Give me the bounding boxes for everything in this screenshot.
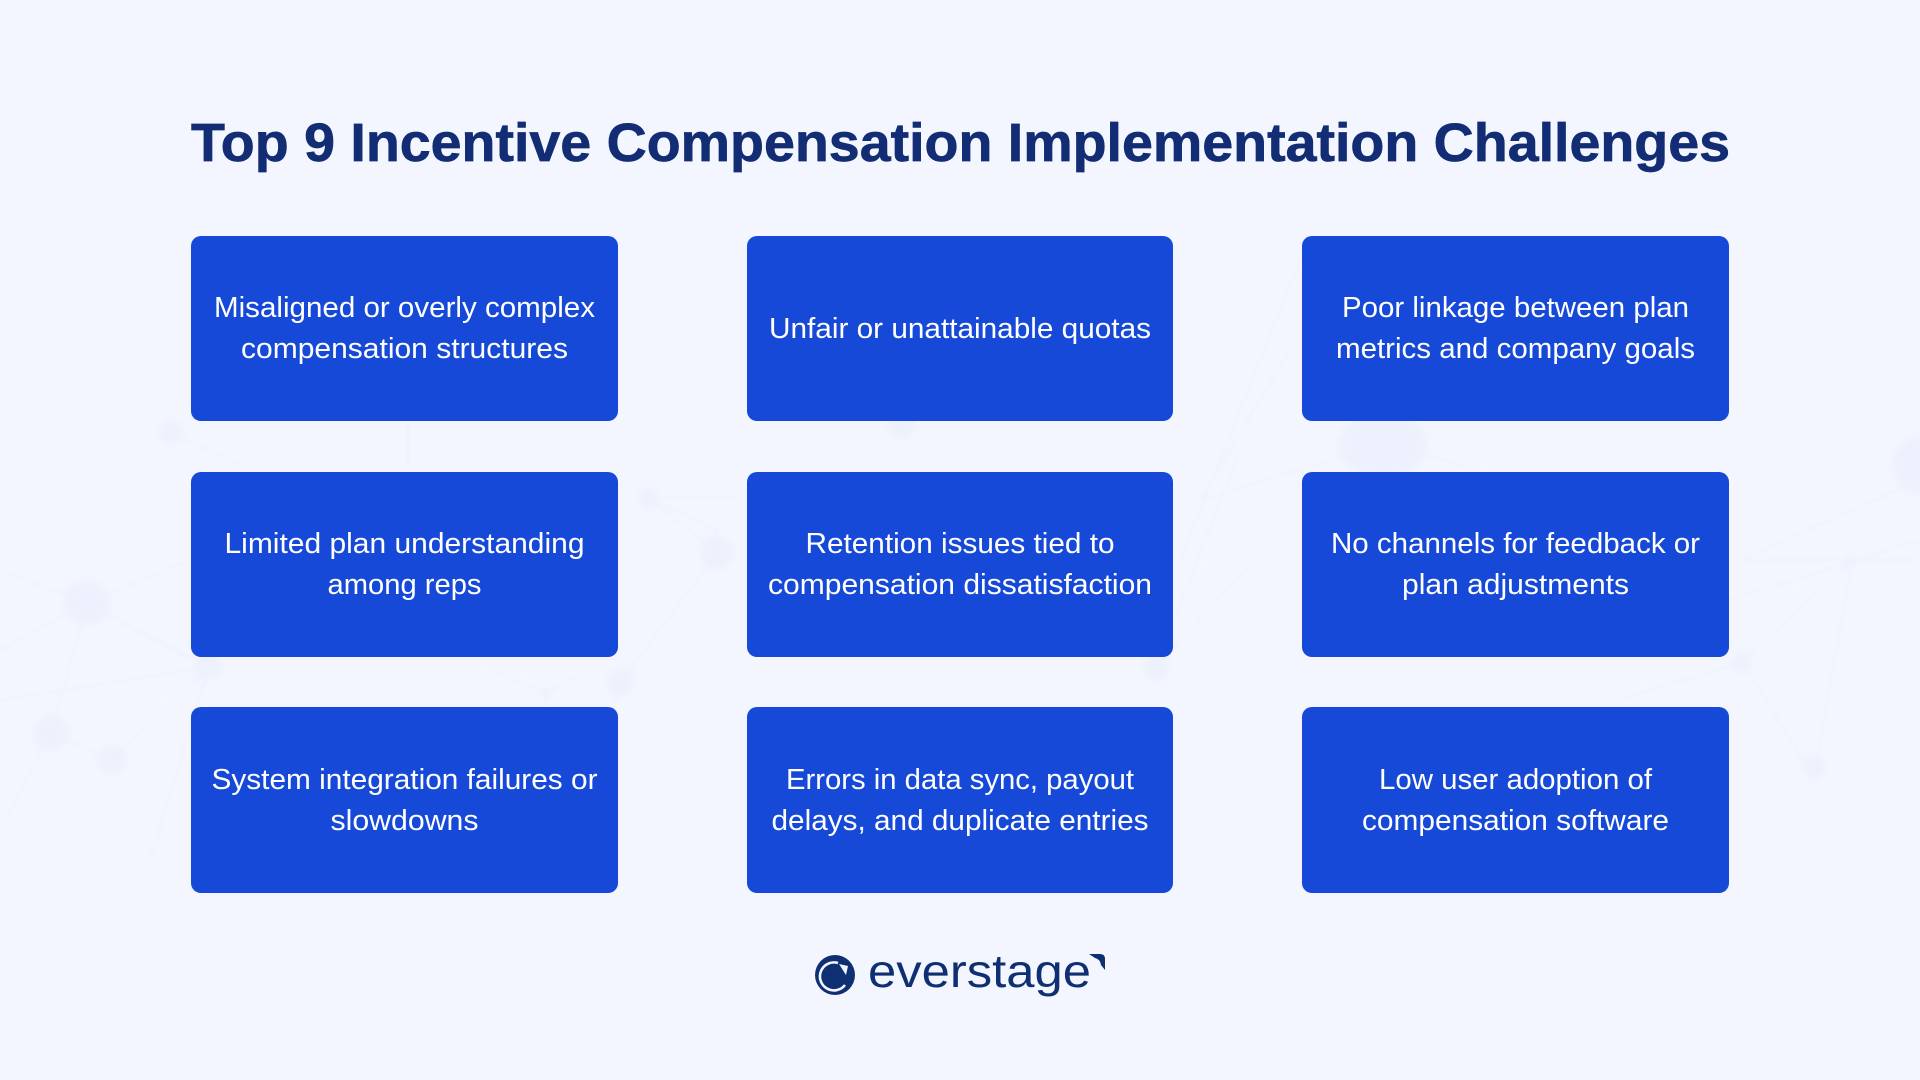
card: no feedback channels: No channels for feedback or bbox=[1331, 528, 1700, 560]
card: data errors: delays, and duplicate entries bbox=[772, 805, 1148, 837]
title: Top 9 Incentive Compensation Implementation Challenges bbox=[191, 113, 1730, 173]
card: poor linkage bbox=[1302, 236, 1729, 421]
card: limited understanding: Limited plan understanding bbox=[224, 528, 584, 560]
card: retention issues bbox=[747, 472, 1173, 657]
card: no feedback channels: plan adjustments bbox=[1402, 569, 1629, 601]
card: data errors: Errors in data sync, payout bbox=[786, 764, 1134, 796]
card: unfair quotas: Unfair or unattainable quotas bbox=[769, 313, 1151, 345]
card: misaligned structures: Misaligned or overly complex bbox=[214, 292, 595, 324]
logo wordmark: everstage bbox=[868, 945, 1091, 997]
card: retention issues: Retention issues tied to bbox=[806, 528, 1114, 560]
card: misaligned structures bbox=[191, 236, 618, 421]
card: poor linkage: Poor linkage between plan bbox=[1342, 292, 1689, 324]
card: integration failures bbox=[191, 707, 618, 893]
card: poor linkage: metrics and company goals bbox=[1336, 333, 1695, 365]
card grid bbox=[191, 236, 1729, 893]
logo: everstage bbox=[815, 945, 1105, 997]
card: limited understanding bbox=[191, 472, 618, 657]
card: unfair quotas bbox=[747, 236, 1173, 421]
card: retention issues: compensation dissatisfaction bbox=[768, 569, 1152, 601]
card: integration failures: slowdowns bbox=[330, 805, 478, 837]
card: low adoption: compensation software bbox=[1362, 805, 1669, 837]
card: integration failures: System integration failures or bbox=[212, 764, 598, 796]
card: low adoption bbox=[1302, 707, 1729, 893]
card: no feedback channels bbox=[1302, 472, 1729, 657]
card: low adoption: Low user adoption of bbox=[1379, 764, 1653, 796]
card: limited understanding: among reps bbox=[328, 569, 482, 601]
icon: logo mark bbox=[815, 955, 855, 995]
background network pattern bbox=[0, 260, 1920, 860]
card: data errors bbox=[747, 707, 1173, 893]
icon: logo corner mark bbox=[1089, 954, 1105, 970]
card: misaligned structures: compensation structures bbox=[241, 333, 568, 365]
